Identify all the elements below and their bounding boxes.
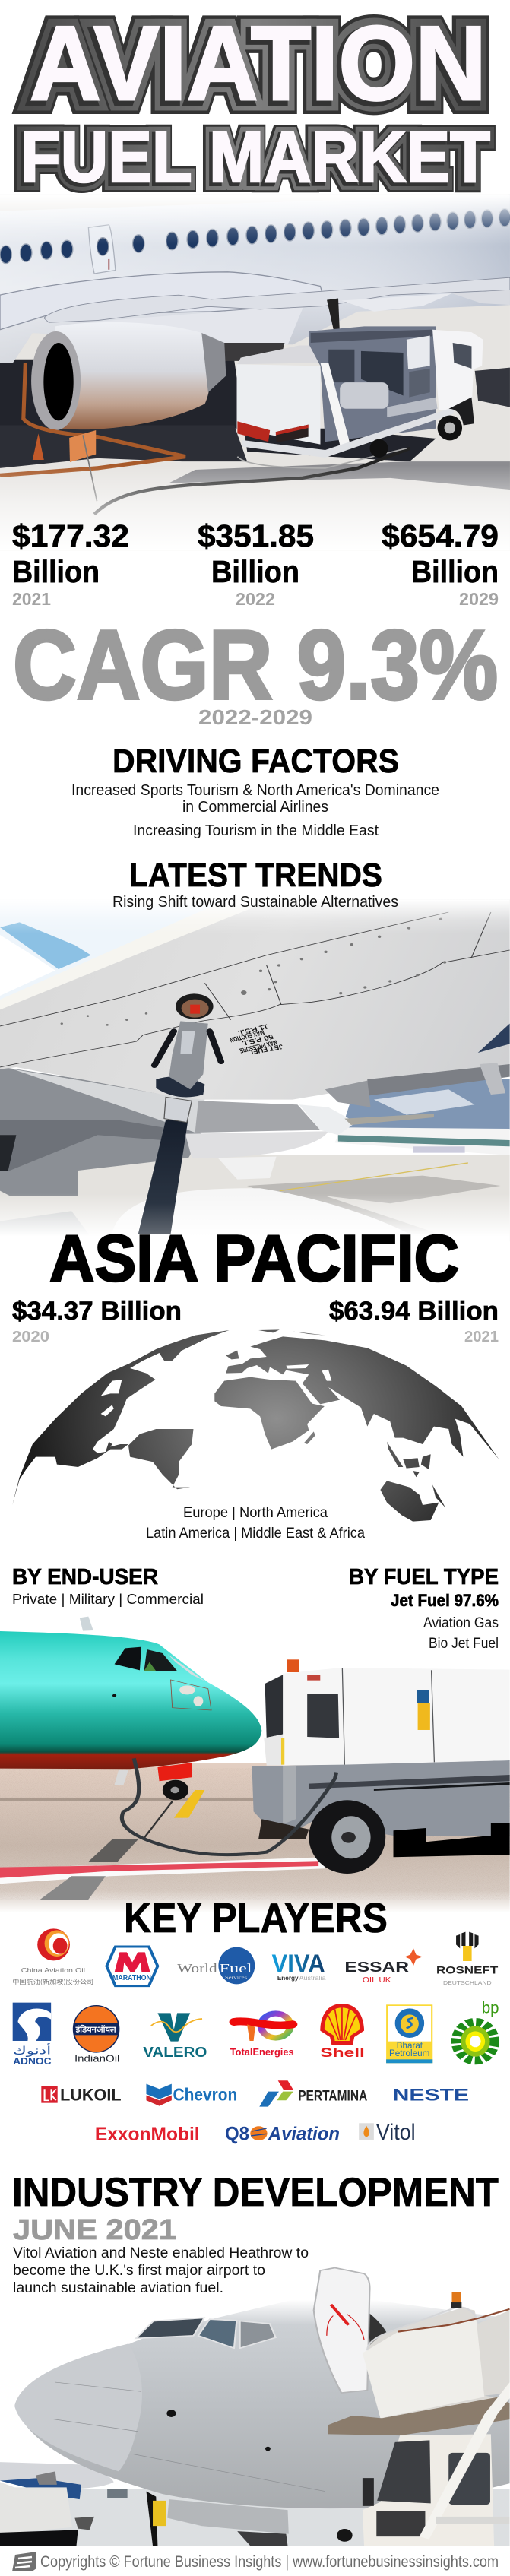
driving factors: DRIVING FACTORS [112, 743, 399, 780]
stat 2029 [382, 518, 499, 609]
logo: BP [456, 1999, 499, 2061]
latest trends: Rising Shift toward Sustainable Alternatives [112, 894, 398, 911]
fuel nozzle and hose [138, 993, 221, 1234]
latest trends [112, 857, 398, 911]
logo: China Aviation Oil [12, 1928, 93, 1986]
other regions: Europe | North America [183, 1505, 328, 1521]
logo: BP: bp [482, 1999, 499, 2017]
wing underside [0, 899, 510, 1100]
apron [0, 1763, 510, 1913]
logo: Essar: OIL UK [363, 1976, 391, 1985]
stat 2021 [12, 518, 129, 609]
foreground equipment left [0, 2482, 94, 2546]
logo: Lukoil [41, 2086, 122, 2105]
logo: Rosneft: DEUTSCHLAND [443, 1979, 492, 1986]
development description [13, 2245, 309, 2296]
photo fade [0, 899, 510, 1244]
regional values: 2021 [464, 1329, 499, 1345]
logo: ExxonMobil: ExxonMobil [95, 2124, 200, 2145]
logo: Valero [143, 2013, 207, 2060]
key players heading: KEY PLAYERS [124, 1894, 388, 1941]
segment: fuel type [349, 1565, 499, 1652]
development description: become the U.K.'s first major airport to [13, 2262, 265, 2279]
boarding stairs [328, 2292, 510, 2435]
logo: Q8 Aviation: Q8 [225, 2124, 249, 2144]
segment: end-user: BY END-USER [12, 1565, 158, 1589]
CAGR period: 2022-2029 [198, 705, 312, 729]
Eurasia [226, 1336, 499, 1459]
main fuselage [14, 2300, 510, 2508]
segment: fuel type: Bio Jet Fuel [429, 1636, 499, 1652]
logo: World Fuel: World [177, 1961, 217, 1976]
segment: fuel type: Jet Fuel 97.6% [391, 1591, 499, 1610]
power unit [252, 1659, 510, 1874]
logo: Vitol: Vitol [376, 2120, 416, 2145]
upside-down fuel placard: MAX PRESSURE [238, 1038, 278, 1054]
stat 2029: Billion [411, 554, 499, 589]
logo: Rosneft [436, 1932, 498, 1986]
fuel truck [237, 326, 483, 458]
Southeast Asia islands [387, 1442, 445, 1507]
logo: Viva Energy: VIVA [272, 1950, 325, 1978]
stat 2022: $351.85 [198, 518, 314, 553]
logo: World Fuel: Fuel [220, 1961, 252, 1976]
segment: fuel type: BY FUEL TYPE [349, 1565, 499, 1589]
ground shadow and tug [247, 1176, 501, 1234]
segment: end-user: Private | Military | Commercial [12, 1591, 204, 1607]
sky [0, 899, 260, 1006]
logos [12, 1928, 499, 2145]
logo: Bharat Petroleum [386, 2004, 432, 2063]
title line: AVIATION outline: AVIATION [27, 6, 483, 124]
lower aircraft body [0, 1066, 201, 1196]
stat 2021: Billion [12, 554, 100, 589]
other regions [146, 1505, 365, 1541]
photo: refuelling nozzle under wing [0, 899, 510, 1244]
radome [14, 2343, 142, 2471]
cabin door [88, 225, 116, 274]
terminal building [335, 1127, 510, 1155]
logo: World Fuel [177, 1947, 255, 1984]
logo: Q8 Aviation: Aviation [268, 2124, 340, 2144]
Madagascar [304, 1431, 315, 1444]
upside-down fuel placard: MAX SUCTION [228, 1028, 265, 1043]
logo: Bharat Petroleum: Petroleum [389, 2048, 429, 2058]
nose gear [146, 2492, 289, 2546]
segment: end-user [12, 1565, 204, 1607]
date: JUNE 2021 [13, 2214, 176, 2246]
logo: IndianOil: इंडियनऑयल [75, 2024, 116, 2034]
photo: teal aircraft and ground power unit [0, 1617, 510, 1913]
logo: China Aviation Oil: China Aviation Oil [21, 1967, 85, 1975]
logo: Lukoil: LUKOIL [60, 2086, 122, 2105]
British Isles [226, 1351, 239, 1359]
world map [12, 1329, 499, 1522]
logo: Chevron: Chevron [173, 2084, 237, 2105]
logo: Viva Energy: Australia [299, 1975, 326, 1982]
logo: Vitol [359, 2120, 416, 2145]
inland seas and lakes [101, 1364, 331, 1416]
driving factors: in Commercial Airlines [182, 799, 328, 816]
stat 2022: Billion [211, 554, 299, 589]
driving factors [71, 743, 439, 839]
logo: Essar: ESSAR [344, 1960, 409, 1975]
title line: AVIATION shadow: AVIATION [27, 8, 483, 125]
region heading: ASIA PACIFIC [49, 1222, 459, 1295]
stat 2021: $177.32 [12, 518, 129, 553]
background aircraft [0, 2462, 128, 2499]
logo: ADNOC [13, 2003, 52, 2067]
wing root fairing [0, 272, 325, 330]
title [18, 5, 490, 200]
Arctic islands [258, 1329, 325, 1336]
logo: Viva Energy [272, 1950, 326, 1982]
stat 2021: 2021 [12, 589, 51, 609]
regional values: $34.37 Billion [12, 1297, 182, 1326]
footer logo [12, 2552, 36, 2571]
logo: Neste: NESTE [393, 2086, 469, 2105]
Australia [380, 1481, 439, 1522]
development description: Vitol Aviation and Neste enabled Heathrow to [13, 2245, 309, 2261]
fuselage [0, 195, 510, 363]
logo: Shell [320, 2004, 365, 2060]
development description: launch sustainable aviation fuel. [13, 2280, 223, 2296]
logo: Marathon [106, 1947, 157, 1986]
title line: AVIATION: AVIATION [30, 5, 486, 122]
title line: AVIATION bevel: AVIATION [27, 6, 484, 124]
stat 2022: 2022 [236, 589, 275, 609]
photo: aircraft nose and stairs [0, 2268, 510, 2546]
upside-down fuel placard: 50 P.S.I. [240, 1032, 274, 1047]
logo: IndianOil: IndianOil [74, 2053, 119, 2064]
logo: China Aviation Oil: 中国航油(新加坡)股份公司 [12, 1976, 93, 1986]
stat 2022 [198, 518, 314, 609]
open door [314, 2268, 391, 2393]
Africa [214, 1377, 325, 1450]
stat 2029: $654.79 [382, 518, 499, 553]
photo fade [0, 195, 510, 550]
logo: Marathon: MARATHON [112, 1974, 151, 1982]
latest trends: LATEST TRENDS [129, 857, 382, 894]
logo: Viva Energy: Energy [277, 1975, 299, 1982]
distant apron [0, 2489, 510, 2546]
segment: fuel type: Aviation Gas [423, 1615, 499, 1631]
engine [31, 322, 226, 430]
photo: aircraft wing and fuel truck [0, 195, 510, 550]
stairs cab [363, 2382, 510, 2546]
other regions: Latin America | Middle East & Africa [146, 1526, 365, 1541]
market size stats [12, 518, 499, 609]
South America [128, 1429, 193, 1489]
upside-down fuel placard [228, 1022, 284, 1056]
logo: Chevron [146, 2084, 237, 2106]
logo: Bharat Petroleum: Bharat [397, 2041, 423, 2051]
North America [12, 1330, 230, 1505]
cockpit windows [136, 2318, 276, 2348]
logo: Valero: VALERO [143, 2044, 207, 2060]
footer [12, 2552, 499, 2571]
logo: Pertamina [259, 2080, 367, 2107]
logo: World Fuel: Services [225, 1974, 247, 1980]
logo: Rosneft: ROSNEFT [436, 1964, 498, 1976]
wing [44, 277, 510, 322]
regional values: $63.94 Billion [329, 1297, 499, 1326]
cabin windows [0, 209, 510, 264]
logo: Pertamina: PERTAMINA [298, 2087, 367, 2104]
hose [122, 1758, 337, 1855]
driving factors: Increasing Tourism in the Middle East [133, 822, 379, 839]
logo: ADNOC: أدنوك [13, 2043, 51, 2057]
logo: ADNOC: ADNOC [13, 2057, 52, 2067]
logo: Shell: Shell [320, 2046, 365, 2060]
logo: TotalEnergies [230, 2014, 294, 2058]
teal aircraft [0, 1617, 261, 1800]
regional values [12, 1297, 499, 1345]
wing panel lines [0, 912, 510, 1067]
ground cables and sign [0, 363, 410, 515]
logo: IndianOil [74, 2006, 119, 2064]
industry development [12, 2170, 499, 2296]
logo: TotalEnergies: TotalEnergies [230, 2048, 294, 2058]
driving factors: Increased Sports Tourism & North America's Dominance [71, 782, 439, 799]
upside-down fuel placard: JET FUEL [247, 1042, 284, 1056]
logo: Q8 Aviation [225, 2124, 340, 2144]
regional values: 2020 [12, 1329, 49, 1345]
upside-down fuel placard: 11 P.S.I. [236, 1022, 269, 1036]
stat 2029: 2029 [459, 589, 499, 609]
ground and horizon [0, 1155, 510, 1241]
pylon [97, 305, 304, 350]
logo: Essar [344, 1948, 423, 1985]
